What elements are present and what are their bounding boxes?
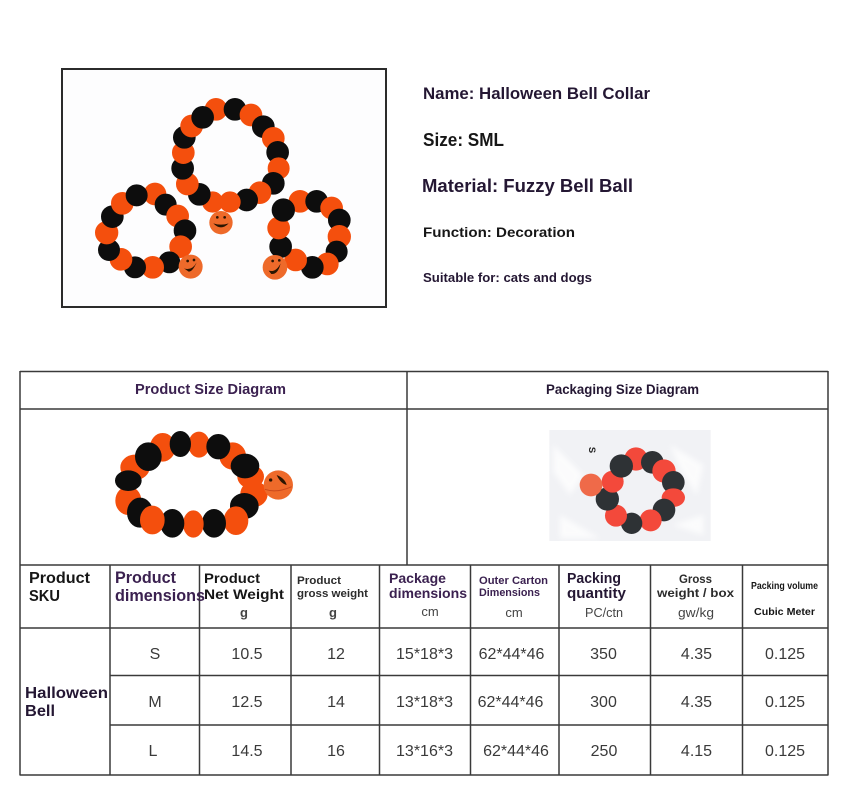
row label: halloween bell: Bell	[25, 703, 55, 720]
row: size L: 16	[327, 743, 345, 760]
header: gross weight	[297, 575, 368, 620]
header: gross weight per box: weight / box	[656, 586, 734, 600]
row: size M: 12.5	[231, 694, 263, 711]
header: gross weight: gross weight	[297, 588, 368, 600]
bag label: S	[587, 447, 597, 453]
header: product dimensions: Product	[115, 569, 176, 587]
row: size L: 0.125	[765, 743, 805, 760]
suitable for: Suitable for: cats and dogs	[423, 270, 592, 285]
row label: halloween bell	[25, 685, 108, 720]
header: product dimensions: dimensions	[115, 587, 205, 605]
header: packing volume	[751, 581, 818, 618]
row: size M: 62*44*46	[478, 694, 544, 711]
header: net weight	[204, 570, 284, 620]
heading: product size diagram: Product Size Diagram	[135, 382, 286, 398]
small collar	[263, 191, 350, 280]
header: package dimensions: cm	[421, 604, 439, 619]
material: Material: Fuzzy Bell Ball	[422, 176, 633, 196]
header: product sku: Product	[29, 570, 91, 587]
row: size L	[149, 743, 805, 760]
row: size M: 4.35	[681, 694, 712, 711]
image: collar side view	[116, 432, 293, 537]
row: size M	[148, 694, 805, 711]
row: size S: S	[150, 646, 160, 663]
row: size S	[150, 646, 805, 663]
header: gross weight per box: Gross	[679, 572, 712, 586]
header: package dimensions: dimensions	[389, 585, 467, 601]
header: packing quantity: quantity	[567, 586, 626, 602]
header: packing quantity: Packing	[567, 571, 621, 587]
row label: halloween bell: Halloween	[25, 685, 108, 702]
row: size S: 350	[590, 646, 617, 663]
large collar	[172, 99, 289, 234]
row: size L: 13*16*3	[396, 743, 453, 760]
row: size L: 4.15	[681, 743, 712, 760]
row: size M: 13*18*3	[396, 694, 453, 711]
header: outer carton dimensions	[479, 575, 548, 620]
header: net weight: Net Weight	[204, 586, 284, 602]
row: size M: 14	[327, 694, 345, 711]
row: size S: 62*44*46	[479, 646, 545, 663]
header: packing quantity	[567, 571, 626, 620]
function: Function: Decoration	[423, 224, 575, 240]
header: gross weight per box: gw/kg	[678, 605, 714, 620]
header: packing quantity: PC/ctn	[585, 605, 623, 620]
row: size S: 12	[327, 646, 345, 663]
header: outer carton dimensions: cm	[505, 605, 523, 620]
image: packaged collar	[549, 430, 711, 541]
row: size S: 10.5	[231, 646, 263, 663]
size: Size: SML	[423, 130, 504, 150]
table: specifications	[20, 371, 828, 776]
row: size L: 14.5	[231, 743, 263, 760]
row: size M: 0.125	[765, 694, 805, 711]
medium collar	[96, 184, 203, 279]
row: size S: 0.125	[765, 646, 805, 663]
row: size M: M	[148, 694, 162, 711]
heading: packaging size diagram: Packaging Size Diagram	[546, 382, 699, 397]
header: outer carton dimensions: Dimensions	[479, 587, 540, 599]
header: package dimensions: Package	[389, 570, 446, 586]
header: net weight: Product	[204, 570, 260, 586]
header: package dimensions	[389, 570, 467, 619]
row: size S: 4.35	[681, 646, 712, 663]
header: packing volume: Packing volume	[751, 581, 818, 592]
header: gross weight: Product	[297, 575, 341, 587]
row: size S: 15*18*3	[396, 646, 453, 663]
row: size L: 250	[591, 743, 617, 760]
panel: product photo	[62, 69, 386, 307]
image: three collars	[96, 99, 350, 280]
header: product sku: SKU	[29, 588, 60, 605]
header: product dimensions	[115, 569, 205, 605]
row: size L: 62*44*46	[483, 743, 549, 760]
header: product sku	[29, 570, 91, 605]
name: Name: Halloween Bell Collar	[423, 84, 650, 103]
row: size M: 300	[590, 694, 617, 711]
header: gross weight per box	[656, 572, 734, 620]
text block: product details	[422, 84, 650, 285]
header: outer carton dimensions: Outer Carton	[479, 575, 548, 587]
header: gross weight: g	[329, 605, 337, 620]
row: size L: L	[149, 743, 158, 760]
header: packing volume: Cubic Meter	[754, 607, 815, 618]
header: net weight: g	[240, 605, 248, 620]
